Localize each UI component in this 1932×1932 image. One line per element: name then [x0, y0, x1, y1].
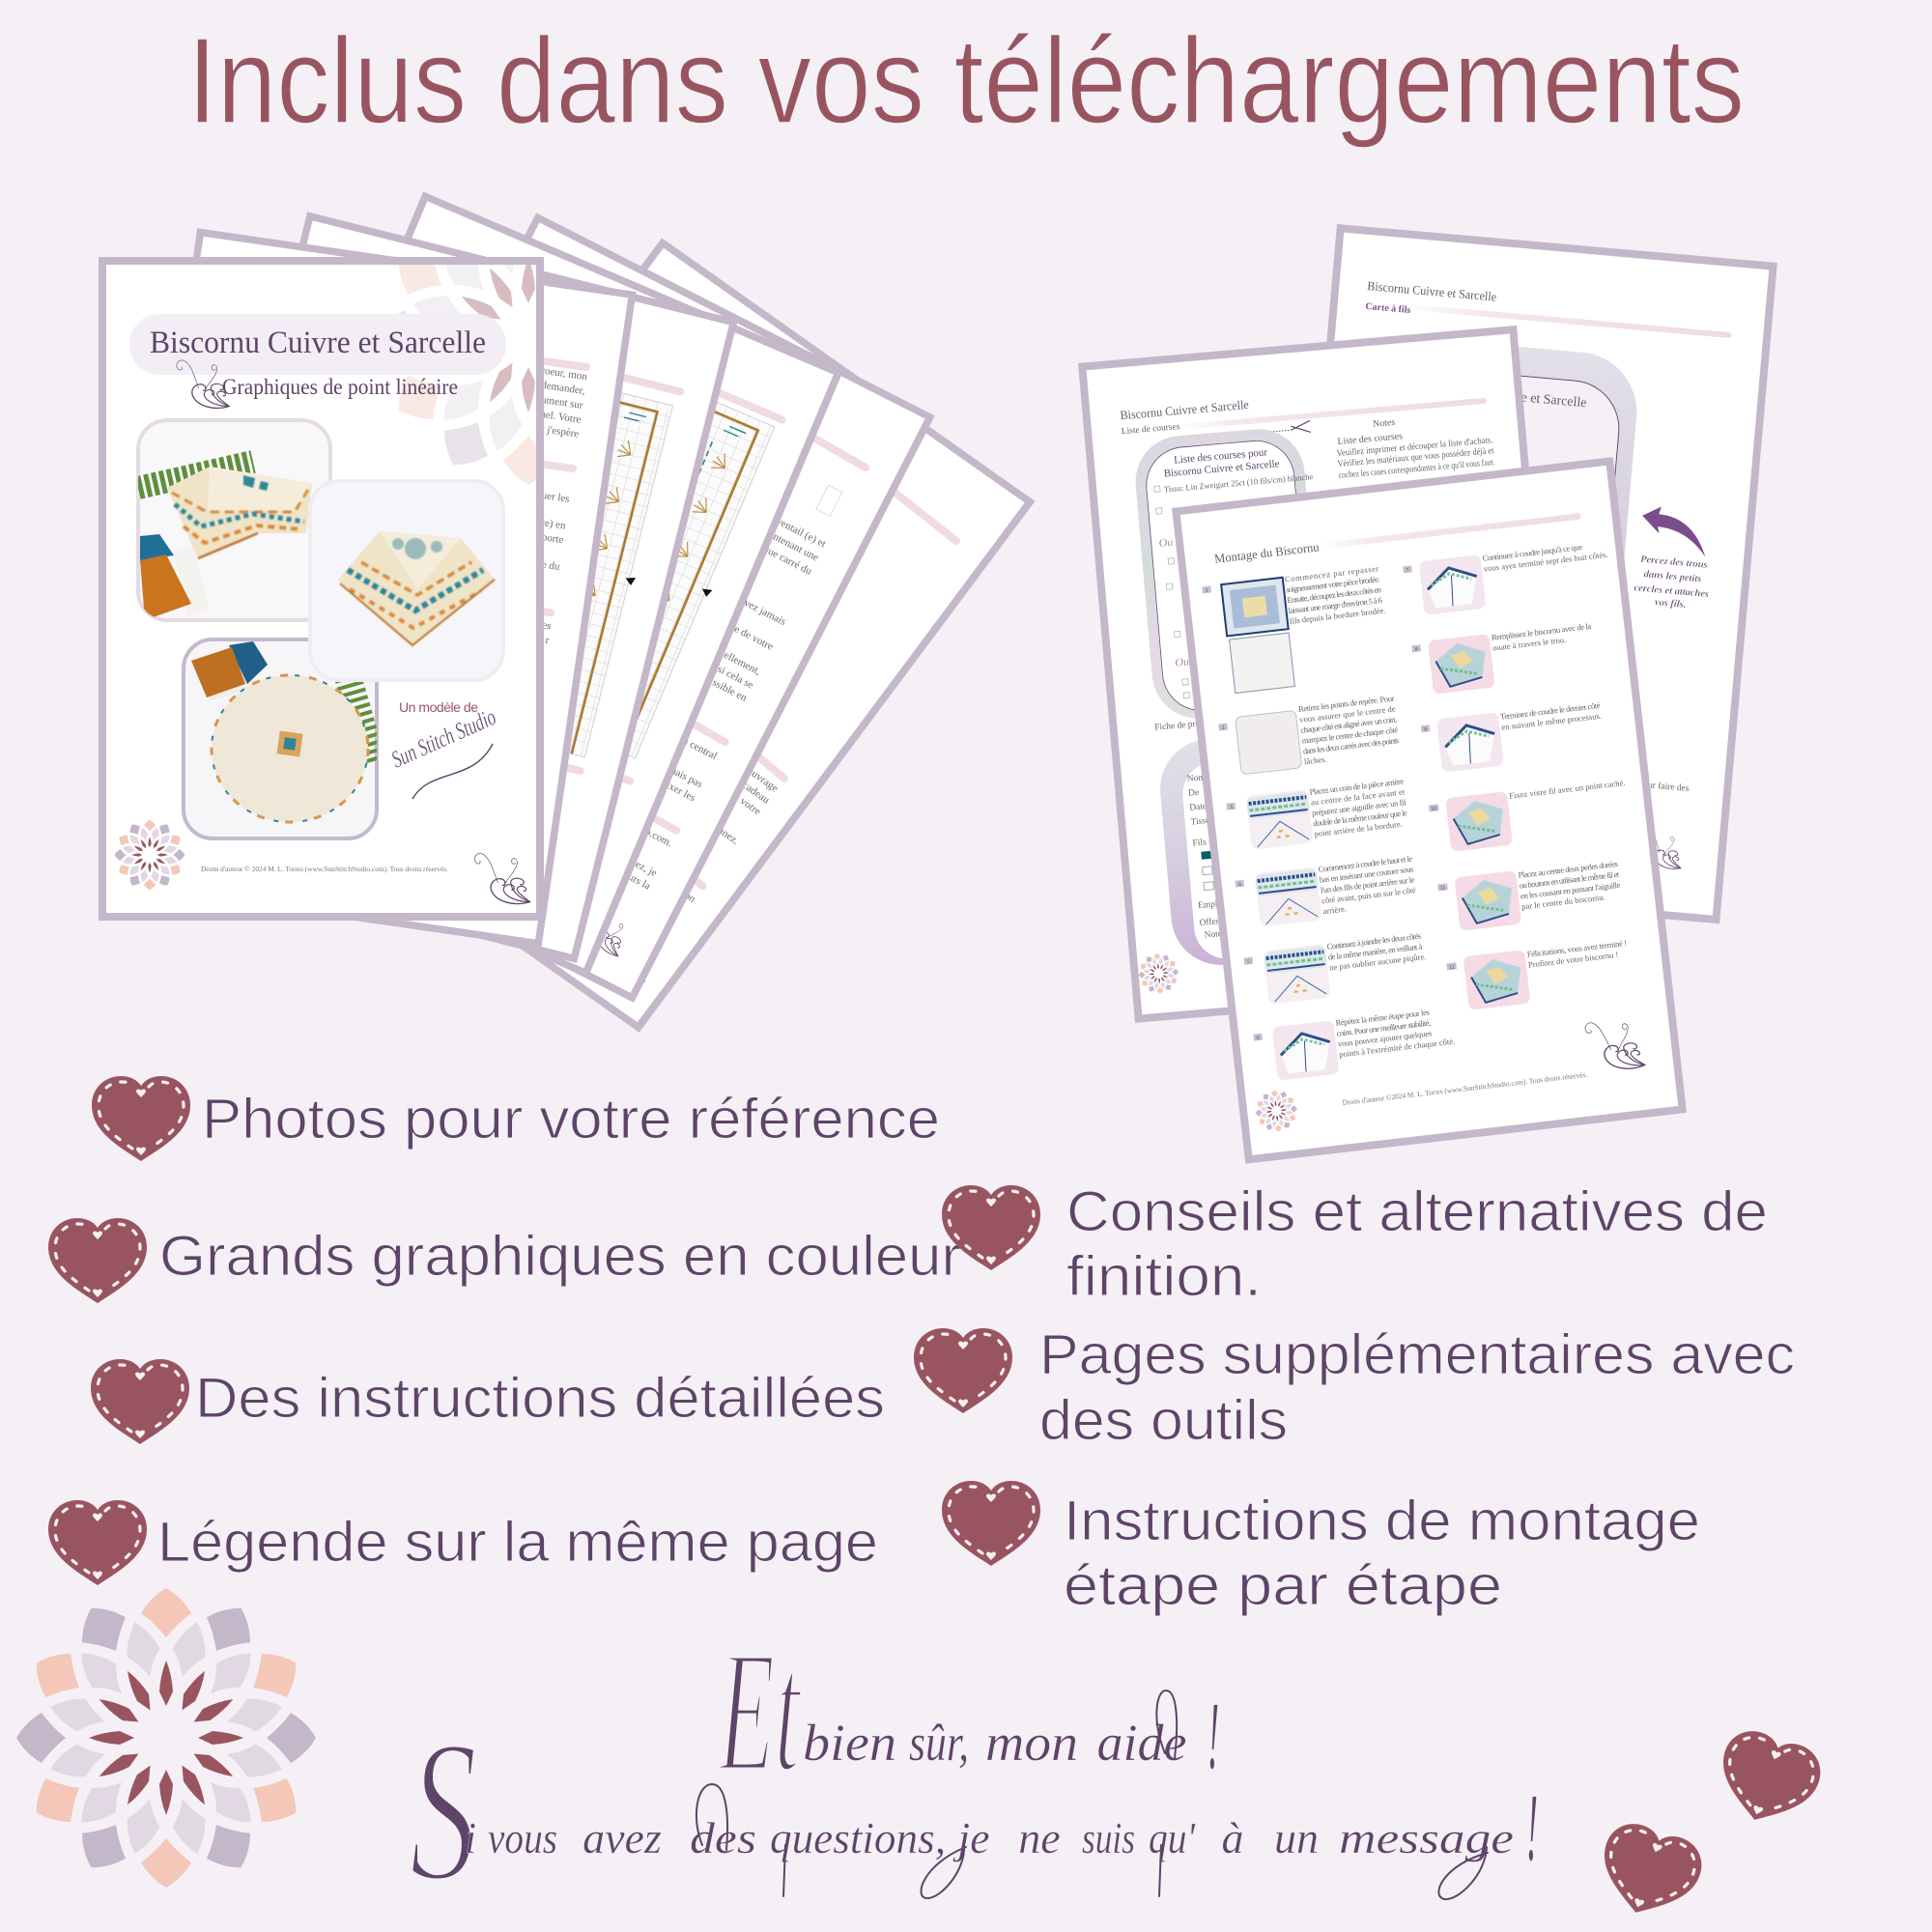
- right stack: thread card page: pour faire des: [1638, 779, 1690, 794]
- bullet: conseils: finition.: [1066, 1245, 1262, 1308]
- step 4: [1235, 853, 1418, 929]
- step 7: vous ayez terminé sept des huit côtés.: [1483, 550, 1608, 574]
- photo 2: biscornu: [310, 481, 503, 680]
- bullet: pages supplémentaires: [914, 1323, 1795, 1452]
- closing message line 2: à: [1221, 1813, 1244, 1862]
- step 2: marquez le centre de chaque côté: [1301, 724, 1399, 746]
- closing message line 1: [717, 1615, 1219, 1807]
- fan page 4: éventail (e) et: [770, 513, 828, 550]
- right stack: thread card page: Biscornu Cuivre et Sarcelle: [1438, 384, 1587, 411]
- step 11: en les cousant en passant l'aiguille: [1520, 880, 1621, 901]
- step 5: [1243, 930, 1430, 1007]
- step 3: préparez une aiguille avec un fil: [1312, 797, 1407, 817]
- closing message line 2: [410, 1699, 1538, 1923]
- right stack: shopping list page: Liste de courses: [1122, 422, 1180, 437]
- step 6: coins. Pour une meilleure stabilité,: [1336, 1017, 1432, 1038]
- fan page 1: text: coeur, mon: [539, 364, 588, 383]
- right stack: assembly instructions page: Montage du Biscornu: [1213, 539, 1321, 566]
- closing message line 2: S: [410, 1699, 477, 1923]
- step 3: double de la même couleur que le: [1313, 808, 1407, 828]
- fan page 5: le votre: [729, 789, 763, 817]
- right stack: shopping list page: Fiche de projet: [1154, 719, 1209, 733]
- page fan: left stack of pattern pages: [106, 196, 1030, 1027]
- step 4: Commencez à coudre le haut et le: [1318, 854, 1413, 874]
- fan page 4: si cela se: [716, 664, 755, 692]
- right stack: shopping list page: Ou: [1175, 655, 1189, 669]
- right stack: thread card page: Percez des trous: [1640, 554, 1708, 571]
- right stack: shopping list page: Notes: [1204, 929, 1226, 941]
- fan page 4: [241, 217, 930, 998]
- step 1: laissant une marge d'environ 5 à 6: [1288, 595, 1383, 615]
- fan page 4: ère de votre: [724, 619, 775, 653]
- bullet: montage: [942, 1481, 1700, 1617]
- right stack: shopping list page: Offert à: [1199, 915, 1229, 928]
- step 2: dans les deux carrés avec des points: [1302, 735, 1400, 755]
- step 12: Profitez de votre biscornu !: [1527, 950, 1619, 970]
- step 5: de la même manière, en veillant à: [1327, 941, 1423, 962]
- fan page 4: fixer les: [661, 778, 697, 804]
- closing message line 2: ne: [1018, 1813, 1061, 1862]
- fan page 4: maintenant une: [757, 524, 821, 564]
- step 10: [1428, 778, 1631, 854]
- step 4: bas en insérant une couture sous: [1319, 864, 1414, 885]
- step 5: Continuez à joindre les deux côtés: [1326, 930, 1422, 952]
- step 8: ouate à travers le trou.: [1492, 635, 1567, 653]
- bullet: photos: [92, 1076, 940, 1161]
- fan page 4: io.com.: [640, 825, 674, 849]
- bullet: photos: Photos pour votre référence: [202, 1088, 940, 1151]
- step 3: point arrière de la bordure.: [1314, 819, 1403, 838]
- closing message line 1: bien: [803, 1714, 896, 1772]
- studio signature: Sun Stitch Studio: [387, 704, 499, 773]
- step 7: 7: [1406, 568, 1409, 574]
- pattern by label: Un modèle de: [399, 699, 478, 715]
- cover subtitle: Graphiques de point linéaire: [222, 375, 458, 399]
- step 1: 1: [1205, 588, 1208, 594]
- right stack: shopping list page: Ou: [1158, 535, 1174, 550]
- fan page 4: n'avez jamais: [731, 591, 787, 628]
- fan page 1: text: porte: [541, 531, 564, 546]
- fan page 1: text: [106, 233, 632, 944]
- fan page 4: itez, je: [628, 856, 659, 879]
- bullet: pages supplémentaires: Pages supplémentaires avec: [1039, 1323, 1795, 1386]
- step 7: Continuez à coudre jusqu'à ce que: [1482, 542, 1583, 563]
- step 6: vous pouvez ajouter quelques: [1337, 1028, 1433, 1049]
- step 10: 10: [1431, 807, 1437, 812]
- step 6: [1253, 1005, 1457, 1083]
- step 9: 9: [1424, 727, 1428, 733]
- cover title pill: [129, 314, 506, 375]
- fan page 4: mais pas: [667, 763, 704, 790]
- step 5: 5: [1247, 959, 1250, 965]
- right stack: thread card page: Biscornu Cuivre et Sarcelle: [1367, 278, 1497, 304]
- bullet: grands graphiques: Grands graphiques en couleur: [159, 1225, 961, 1288]
- text: !: [1208, 1682, 1219, 1789]
- right stack: shopping list page: Fils :: [1192, 838, 1211, 848]
- step 12: [1446, 938, 1633, 1012]
- bullet: légende: Légende sur la même page: [157, 1511, 878, 1574]
- step 9: en suivant le même processus.: [1501, 711, 1602, 732]
- fan page 1: text: cument sur: [536, 393, 584, 412]
- fan page 1: text: s demander,: [534, 379, 586, 397]
- right stack: shopping list page: cochez les cases correspondantes à ce qu'il vous faut.: [1338, 457, 1495, 481]
- fan page 1: text: es: [542, 619, 552, 632]
- fan page 1: text: e du: [541, 559, 561, 573]
- closing message line 2: des: [690, 1813, 756, 1862]
- right stack: thread card page: dans les petits: [1643, 569, 1702, 584]
- right stack: shopping list page: Notes: [1373, 417, 1396, 430]
- step 4: 4: [1238, 882, 1241, 888]
- bullet: conseils: [942, 1180, 1768, 1308]
- fan page 2: chart: [151, 216, 733, 958]
- step 11: 11: [1439, 886, 1446, 892]
- cover page: [99, 257, 544, 921]
- closing message line 1: Et: [717, 1615, 802, 1807]
- fan page 3: chart: [173, 196, 838, 973]
- right stack: shopping list page: Tissu: [1190, 816, 1210, 828]
- right stack: assembly instructions page: Droits d'auteur ©2024 M. L. Torres (www.SunStitchStudio.com). Tous droits réservés.: [1342, 1070, 1588, 1107]
- script swashes: [696, 1690, 1488, 1899]
- step 2: Retirez les points de repère. Pour: [1297, 694, 1395, 714]
- right stack: shopping list page: De: [1188, 788, 1200, 799]
- step 6: points à l'extrémité de chaque côté.: [1339, 1037, 1456, 1059]
- step 2: [1217, 693, 1402, 777]
- fan page 5: [271, 243, 1030, 1027]
- cover copyright: Droits d'auteur © 2024 M. L. Torres (www.SunStitchStudio.com). Tous droits réservés.: [201, 865, 448, 873]
- cover title pill: Biscornu Cuivre et Sarcelle: [150, 326, 486, 360]
- fan page 4: tellement,: [720, 648, 762, 677]
- closing message line 2: i: [465, 1813, 476, 1862]
- step 11: par le centre du biscornu.: [1521, 892, 1605, 911]
- bullet: légende: [48, 1500, 878, 1585]
- step 9: Terminez de coudre le dernier côté: [1500, 700, 1601, 722]
- closing message line 2: un: [1274, 1813, 1319, 1862]
- closing message line 2: vous: [488, 1813, 557, 1862]
- step 12: Félicitations, vous avez terminé !: [1526, 938, 1628, 959]
- step 8: Remplissez le biscornu avec de la: [1491, 621, 1592, 642]
- right stack: thread card page: cercles et attaches: [1634, 582, 1709, 600]
- large mandala: [16, 1588, 316, 1888]
- right stack: shopping list page: Biscornu Cuivre et Sarcelle: [1120, 397, 1250, 422]
- bullet: montage: étape par étape: [1064, 1554, 1502, 1617]
- fan page 1: text: nnel. Votre: [534, 408, 582, 426]
- photo 3: round cushion: [184, 639, 377, 838]
- right stack: shopping list page: Emplacement: [1198, 897, 1249, 911]
- step 2: 2: [1221, 725, 1225, 731]
- fan page 5: on: [682, 890, 698, 905]
- closing message line 1: sûr,: [909, 1714, 969, 1772]
- closing message line 2: suis: [1082, 1813, 1135, 1862]
- cover flourish: [474, 853, 530, 904]
- right stack: shopping list page: Date: [1189, 802, 1208, 813]
- step 1: Ensuite, découpez les deux côtés en: [1287, 584, 1382, 605]
- step 8: 8: [1415, 647, 1418, 653]
- step 6: Répétez la même étape pour les: [1335, 1008, 1431, 1028]
- step 2: lâches.: [1304, 754, 1327, 766]
- right stack: thread card page: Carte à fils: [1365, 301, 1411, 316]
- step 8: [1411, 621, 1597, 696]
- step 2: vous assurer que le centre de: [1299, 703, 1396, 724]
- bullet: montage: Instructions de montage: [1064, 1490, 1700, 1552]
- fan page 5: ouvrage: [745, 765, 781, 794]
- step 3: Placez un coin de la pièce arrière: [1309, 776, 1405, 797]
- fan page 1: text: ce) en: [539, 517, 567, 532]
- fan page 5: cadeau: [740, 780, 772, 807]
- right stack: shopping list page: [1082, 329, 1570, 1019]
- step 11: [1437, 859, 1624, 933]
- right stack: shopping list page: Veuillez imprimer et découper la liste d'achats.: [1336, 436, 1493, 459]
- closing message line 2: je: [952, 1813, 990, 1862]
- step 1: [1202, 563, 1393, 696]
- right stack: shopping list page: Biscornu Cuivre et Sarcelle: [1163, 458, 1280, 479]
- bullet: grands graphiques: [48, 1218, 961, 1303]
- bullet: instructions: Des instructions détaillées: [195, 1367, 885, 1430]
- decorative heart top: [1708, 1723, 1828, 1835]
- small flourish beside subtitle: [177, 360, 229, 408]
- fan page 4: que carré du: [761, 543, 814, 578]
- closing message line 1: mon: [985, 1714, 1078, 1772]
- right stack: shopping list page: Liste des courses pour: [1174, 446, 1268, 467]
- cover small mandala: [115, 820, 185, 890]
- closing message line 1: aide: [1097, 1714, 1186, 1772]
- step 3: [1226, 776, 1409, 852]
- step 1: fils depuis la bordure brodée.: [1289, 605, 1386, 626]
- right stack: assembly instructions page: [1176, 462, 1683, 1159]
- closing message line 2: message: [1339, 1813, 1514, 1862]
- text: !: [1526, 1774, 1538, 1881]
- fan page 4: urs la: [626, 871, 652, 893]
- studio signature: [387, 704, 499, 799]
- step 11: ou boutons en utilisant le même fil et: [1519, 869, 1620, 891]
- step 9: [1420, 700, 1605, 775]
- step 3: 3: [1230, 805, 1233, 810]
- right stack: shopping list page: Tissu: Lin Zweigart 25ct (10 fils/cm) blanche: [1163, 471, 1314, 495]
- step 1: Commencez par repasser: [1284, 563, 1379, 583]
- fan page 1: text: et j'espère: [536, 422, 580, 440]
- fan page 4: ssible en: [710, 677, 750, 704]
- closing message line 2: avez: [582, 1813, 662, 1862]
- step 12: 12: [1449, 965, 1455, 971]
- step 6: 6: [1257, 1036, 1260, 1041]
- step 4: l'un des fils de point arrière sur le: [1321, 874, 1415, 895]
- bullet: pages supplémentaires: des outils: [1039, 1389, 1288, 1452]
- right stack: shopping list page: Vérifiez les matériaux que vous possédez déjà et: [1337, 445, 1494, 469]
- photo 1: biscornu with threads: [138, 420, 330, 620]
- step 10: Fixez votre fil avec un point caché.: [1509, 778, 1626, 801]
- decorative heart bottom: [1589, 1816, 1709, 1928]
- step 3: au centre de la face avant et: [1310, 786, 1406, 808]
- right stack: thread card page: vos fils.: [1654, 597, 1687, 611]
- fan page 1: text: r: [545, 635, 550, 646]
- bullet: instructions: [91, 1359, 885, 1444]
- closing message line 2: qu': [1149, 1813, 1196, 1862]
- step 7: [1403, 539, 1612, 617]
- closing message line 2: questions,: [770, 1813, 946, 1862]
- title: Inclus dans vos téléchargements: [187, 13, 1745, 149]
- pale mandala on cover: [398, 265, 536, 485]
- step 11: Placez au centre deux perles dorées: [1518, 859, 1619, 880]
- fan page 1: text: tuer les: [538, 489, 570, 505]
- bullet: conseils: Conseils et alternatives de: [1066, 1180, 1768, 1243]
- right stack: thread card page: [1284, 228, 1774, 920]
- step 1: soigneusement votre pièce brodée.: [1286, 574, 1380, 594]
- fan page 4: n central: [681, 735, 719, 762]
- step 4: arrière.: [1322, 903, 1347, 916]
- right stack: shopping list page: Nom: [1186, 773, 1207, 784]
- step 5: ne pas oublier aucune piqûre.: [1329, 952, 1427, 972]
- fan page 5: onnez.: [711, 821, 741, 847]
- step 2: chaque côté est aligné avec un coin,: [1300, 714, 1397, 735]
- right stack: shopping list page: Liste des courses: [1337, 431, 1404, 447]
- step 4: côté avant, puis un sur le côté: [1321, 885, 1416, 905]
